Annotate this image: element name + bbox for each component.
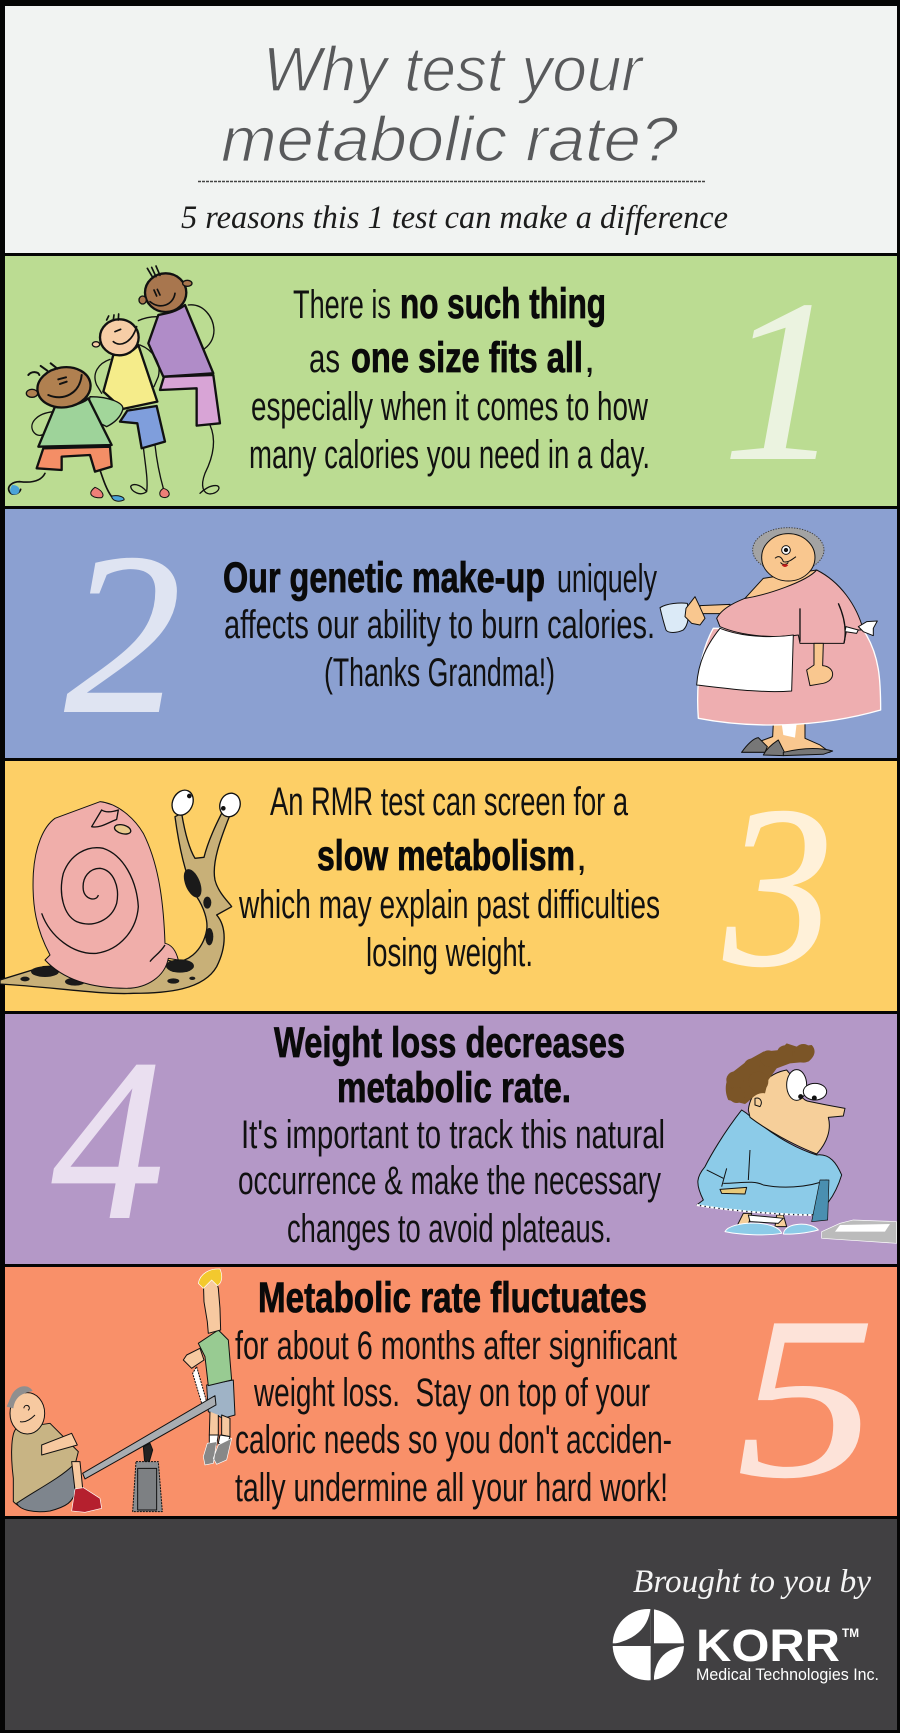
- reason 5 text: for about 6 months after significant: [235, 1324, 677, 1368]
- reason 5 text: [235, 1274, 677, 1510]
- panel 1: one size fits all: [5, 253, 897, 508]
- illustration: man in bathrobe with scale: [697, 1043, 897, 1243]
- reason 1 text: many calories you need in a day.: [249, 433, 650, 477]
- reason 3 text: ,: [576, 835, 587, 879]
- reason 3 text: [238, 780, 660, 975]
- reason 3 text: An RMR test can screen for a: [270, 780, 629, 824]
- panel 2: genetic make-up: [5, 506, 897, 761]
- illustration: three children: [9, 266, 220, 501]
- reason 5 text: tally undermine all your hard work!: [235, 1466, 668, 1510]
- reason 1 text: [249, 280, 650, 477]
- number 5: 5: [737, 1270, 875, 1525]
- reason 2 text: uniquely: [557, 557, 657, 601]
- heading: why test your metabolic rate: Why test your: [263, 35, 645, 105]
- reason 3 text: which may explain past difficulties: [238, 883, 660, 927]
- logo: KORR mark: [610, 1603, 687, 1687]
- reason 1 text: There is: [293, 283, 391, 327]
- panel: title header: [5, 6, 897, 253]
- reason 3 text: slow metabolism: [317, 832, 575, 880]
- reason 4 text: occurrence & make the necessary: [238, 1159, 661, 1203]
- number 2: 2: [65, 506, 181, 761]
- illustration: grandma with teacup: [660, 528, 881, 756]
- reason 5 text: weight loss. Stay on top of your: [253, 1371, 650, 1415]
- reason 1 text: especially when it comes to how: [251, 385, 648, 429]
- number 1: 1: [723, 253, 841, 508]
- heading: why test your metabolic rate: metabolic rate?: [221, 105, 678, 175]
- reason 3 text: losing weight.: [366, 931, 533, 975]
- subtitle: 5 reasons this 1 test can make a difference: [181, 200, 728, 236]
- reason 2 text: affects our ability to burn calories.: [224, 603, 655, 647]
- illustration: snail: [0, 787, 243, 994]
- reason 4 text: changes to avoid plateaus.: [287, 1207, 612, 1251]
- reason 4 text: metabolic rate.: [337, 1064, 571, 1112]
- panel 3: slow metabolism: [0, 759, 897, 1014]
- panel 5: metabolic rate fluctuates: [5, 1267, 897, 1525]
- reason 1 text: ,: [584, 337, 595, 381]
- logo: KORR wordmark: KORR: [696, 1620, 840, 1671]
- logo: KORR wordmark: TM: [842, 1626, 859, 1640]
- reason 4 text: It's important to track this natural: [241, 1113, 665, 1157]
- text: brought to you by: Brought to you by: [633, 1564, 871, 1600]
- illustration: seesaw with two men: [7, 1269, 235, 1512]
- reason 1 text: no such thing: [400, 280, 606, 328]
- reason 2 text: (Thanks Grandma!): [324, 651, 555, 695]
- reason 2 text: [223, 554, 657, 695]
- logo: KORR wordmark: Medical Technologies Inc.: [696, 1666, 879, 1684]
- number 3: 3: [723, 759, 833, 1014]
- heading: why test your metabolic rate: [221, 35, 678, 175]
- panel 4: weight loss: [5, 1012, 897, 1267]
- reason 5 text: caloric needs so you don't acciden-: [235, 1418, 672, 1462]
- reason 5 text: Metabolic rate fluctuates: [258, 1274, 647, 1322]
- reason 2 text: Our genetic make-up: [223, 554, 545, 602]
- logo: KORR wordmark: [696, 1620, 879, 1684]
- reason 1 text: as: [309, 337, 340, 381]
- reason 1 text: one size fits all: [351, 334, 583, 382]
- reason 4 text: Weight loss decreases: [274, 1019, 625, 1067]
- panel: footer sponsor: [5, 1519, 897, 1730]
- number 4: 4: [52, 1012, 164, 1267]
- reason 4 text: [238, 1019, 665, 1251]
